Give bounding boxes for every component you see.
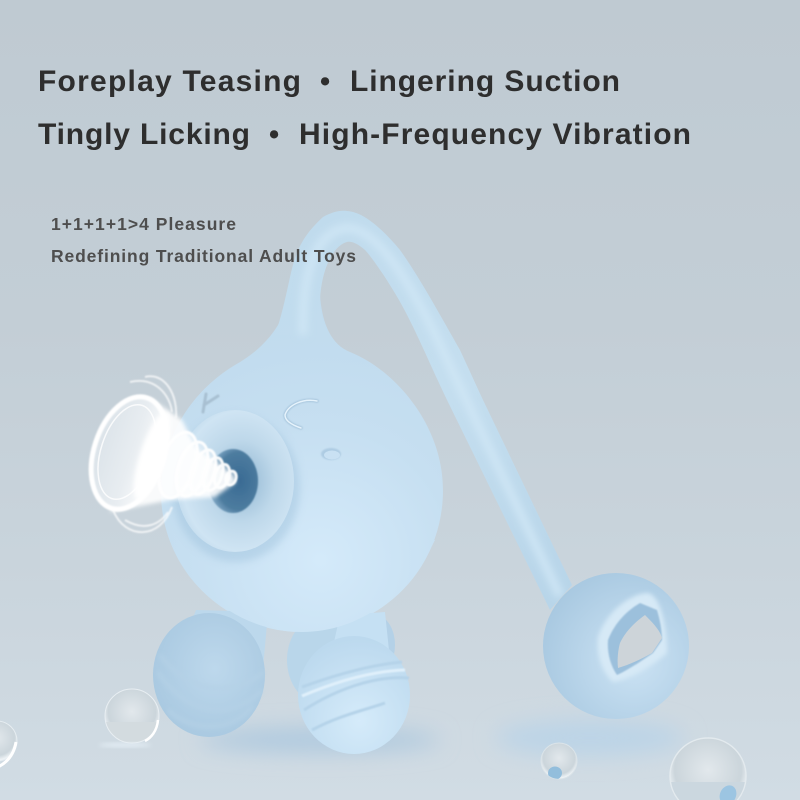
right foot ball <box>287 612 410 754</box>
subheading: 1+1+1+1>4 Pleasure <box>51 214 236 234</box>
licking ball head <box>543 573 689 719</box>
glass bead: small bottom <box>541 743 577 780</box>
airflow vortex <box>78 376 238 532</box>
heading: Foreplay Teasing <box>38 65 301 98</box>
heading: Tingly Licking <box>38 118 250 151</box>
tube cable <box>275 211 572 610</box>
body lower overlap <box>170 540 435 632</box>
glass bead: large bottom right <box>665 738 751 800</box>
main teardrop body <box>161 290 443 632</box>
left foot ball <box>153 610 268 737</box>
heading: Lingering Suction <box>350 65 620 98</box>
subheading: Redefining Traditional Adult Toys <box>51 246 356 266</box>
glass bead: left <box>104 688 160 748</box>
glass bead: far left <box>0 721 17 767</box>
body face marks <box>203 394 341 460</box>
heading <box>38 65 691 151</box>
suction ring <box>172 410 300 562</box>
heading bullet: • <box>320 66 330 98</box>
floor shadows <box>200 720 685 756</box>
heading: High-Frequency Vibration <box>299 118 691 151</box>
heading: • <box>269 119 279 151</box>
subheading <box>51 214 356 266</box>
